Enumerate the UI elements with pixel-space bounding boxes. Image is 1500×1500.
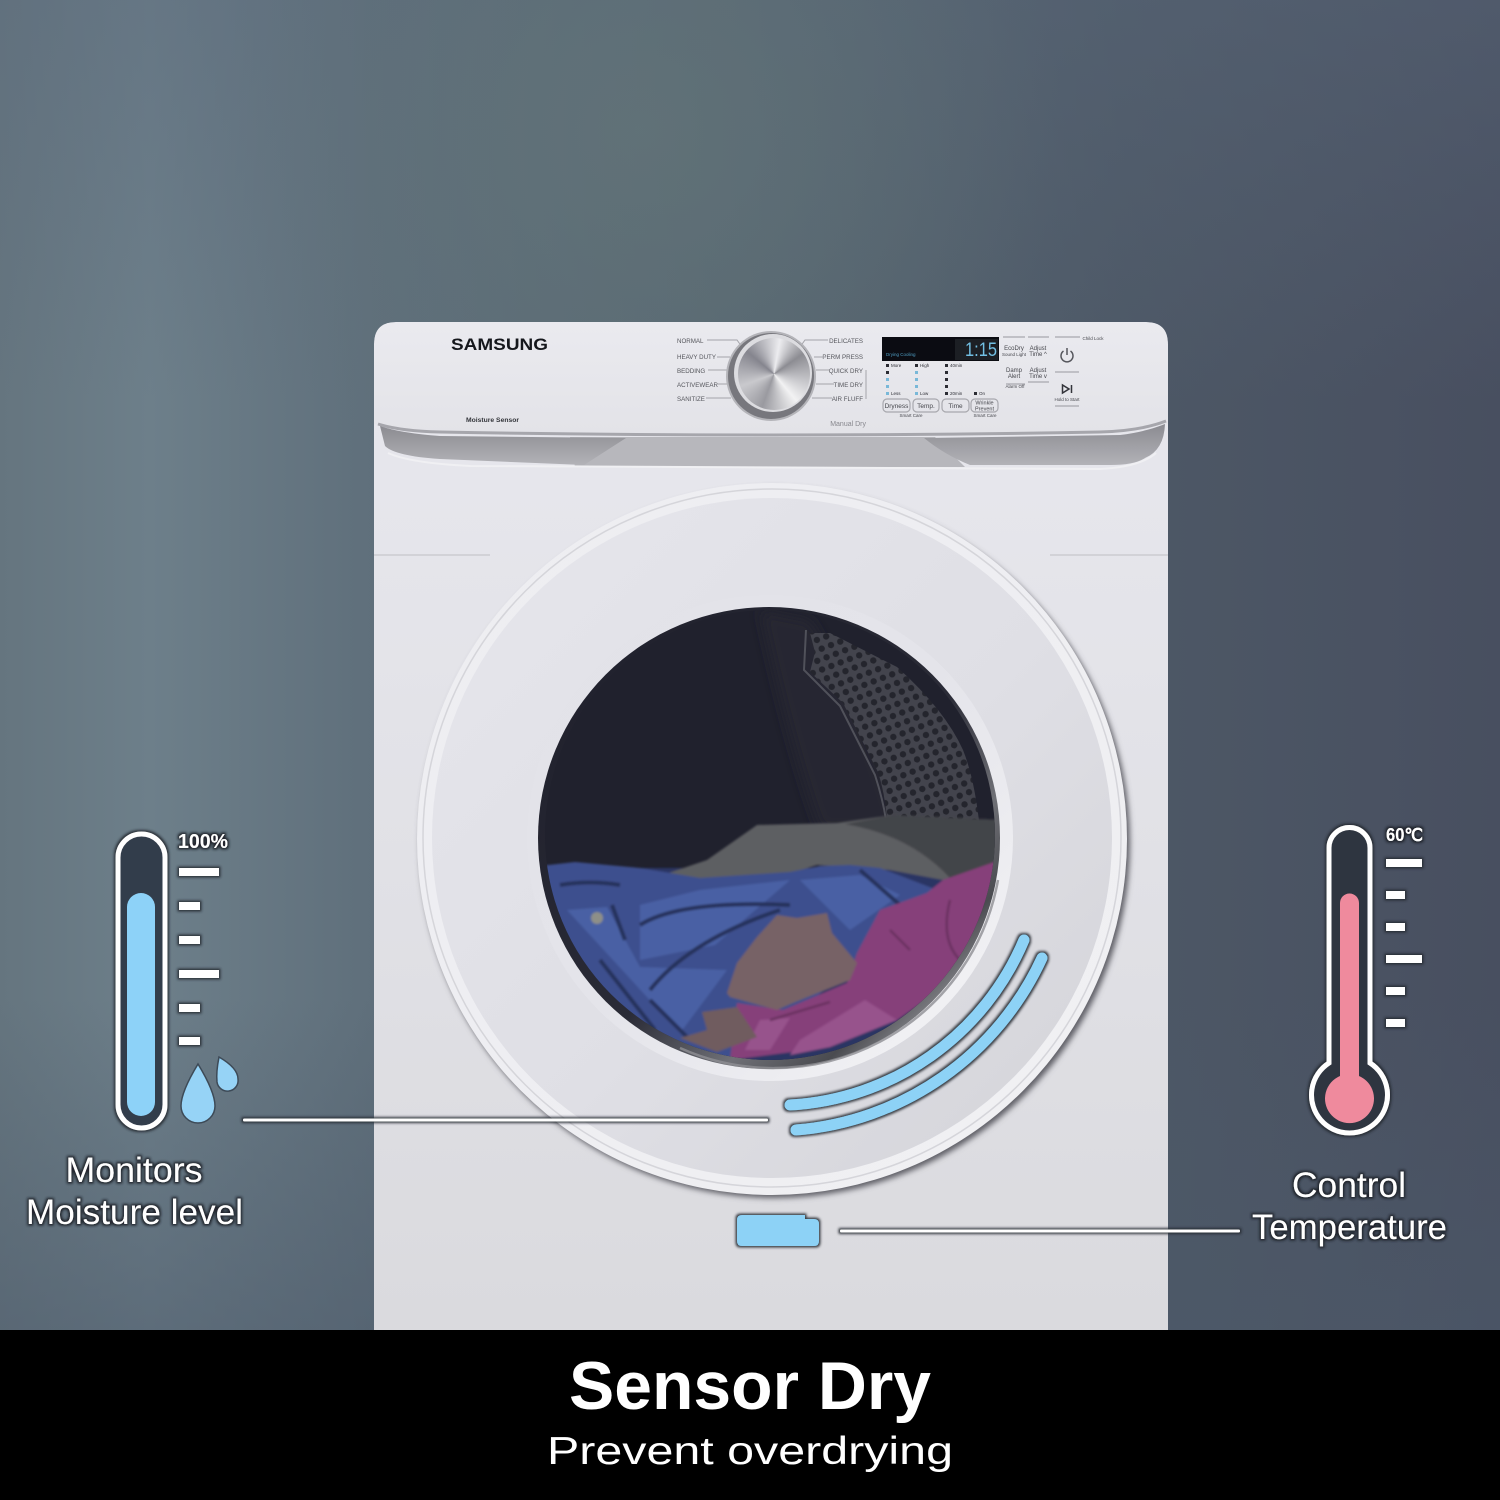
gauge tube: [118, 834, 165, 1128]
right side buttons: Sound Light: [1002, 352, 1027, 357]
footer bar: [0, 1330, 1500, 1500]
temperature sensor block: [737, 1215, 819, 1246]
right side buttons: Alert: [1008, 374, 1020, 380]
blue garment highlights: [567, 875, 900, 1033]
right cycle labels: AIR FLUFF: [832, 396, 863, 403]
option buttons: Dryness: [885, 403, 909, 410]
thermometer level: [1325, 894, 1374, 1123]
right side buttons: Adjust: [1030, 368, 1047, 374]
right side buttons: Time ^: [1029, 352, 1047, 358]
right side buttons: EcoDry: [1004, 346, 1024, 352]
icon: water drops: [181, 1057, 238, 1123]
digital display: Drying Cooling: [886, 352, 916, 357]
moisture gauge: [26, 831, 243, 1232]
subtitle: Prevent overdrying: [547, 1430, 953, 1473]
option buttons: Prevent: [975, 406, 994, 412]
leader line: moisture: [243, 1118, 768, 1122]
right side buttons: [1002, 336, 1104, 406]
clothes: [530, 815, 1000, 1070]
door face: [432, 498, 1112, 1178]
dryer appliance: [374, 322, 1168, 1330]
digital display: 1:15: [965, 340, 997, 361]
right side buttons: Alarm Off: [1006, 384, 1025, 389]
right cycle labels: Manual Dry: [830, 421, 866, 428]
option indicators: 20min: [950, 391, 963, 396]
left cycle labels: NORMAL: [677, 338, 704, 345]
blue garment creases: [560, 870, 900, 1040]
drum shading: [760, 610, 900, 830]
thermometer outline: [1312, 828, 1388, 1133]
window chrome rim: [538, 607, 1000, 1069]
control panel: [374, 322, 1168, 469]
power icon: [1061, 348, 1073, 362]
temperature gauge: [1252, 825, 1447, 1247]
option indicators: More: [891, 363, 902, 368]
option buttons: Smart Care: [973, 413, 997, 418]
start pause icon: [1062, 385, 1072, 393]
cycle dial: [726, 331, 816, 421]
door: [417, 483, 1130, 1198]
right cycle labels: [800, 338, 866, 428]
thermometer maximum: 60℃: [1386, 825, 1423, 845]
right cycle labels: TIME DRY: [834, 382, 863, 389]
door shadow: [420, 488, 1130, 1198]
moisture sensor arcs: [790, 940, 1042, 1130]
temperature label: Temperature: [1252, 1208, 1447, 1247]
leader line: temperature: [840, 1230, 1240, 1232]
option buttons: Smart Care: [899, 413, 923, 418]
right side buttons: Time v: [1029, 374, 1047, 380]
moisture sensor badge: Moisture Sensor: [466, 417, 519, 424]
thermometer ticks: [1386, 859, 1422, 1027]
moisture label: [26, 1151, 243, 1232]
handle recess: [380, 424, 1165, 469]
right cycle labels: QUICK DRY: [829, 368, 863, 375]
samsung logo: SAMSUNG: [451, 336, 548, 354]
moisture label: Moisture level: [26, 1193, 243, 1232]
option indicators: Low: [920, 391, 929, 396]
grey garment: [670, 816, 950, 881]
left cycle labels: SANITIZE: [677, 396, 705, 403]
right side buttons: Hold to Start: [1054, 397, 1080, 402]
option buttons: Temp.: [917, 403, 935, 410]
option indicators: [886, 363, 986, 396]
seam line: [374, 554, 1168, 556]
left cycle labels: [677, 338, 742, 403]
left cycle labels: ACTIVEWEAR: [677, 382, 718, 389]
gauge maximum: 100%: [178, 831, 228, 853]
magenta garment: [730, 860, 1000, 1060]
right cycle labels: PERM PRESS: [822, 354, 863, 361]
gauge level: [127, 893, 155, 1116]
left cycle labels: HEAVY DUTY: [677, 354, 716, 361]
option indicators: High: [920, 363, 930, 368]
drum mesh: [804, 630, 980, 830]
temperature label: [1252, 1166, 1447, 1247]
taupe garment: [727, 913, 857, 1010]
drum window: [547, 622, 995, 1060]
right side buttons: Adjust: [1030, 346, 1047, 352]
option buttons: Time: [948, 403, 963, 410]
left cycle labels: BEDDING: [677, 368, 705, 375]
right side buttons: Child Lock: [1082, 336, 1104, 341]
option indicators: 40min: [950, 363, 963, 368]
window trim: [644, 713, 1013, 1081]
option indicators: On: [979, 391, 986, 396]
option buttons: Wrinkle: [975, 400, 994, 406]
blue garment: [547, 860, 932, 1056]
dryer body: [374, 400, 1168, 1330]
right side buttons: Damp: [1006, 368, 1023, 374]
right cycle labels: DELICATES: [829, 338, 863, 345]
gauge ticks: [179, 868, 219, 1045]
temperature label: Control: [1292, 1166, 1406, 1205]
window rim highlight: [680, 880, 998, 1068]
digital display: [882, 337, 999, 361]
clothes base: [642, 867, 943, 1060]
title: Sensor Dry: [569, 1348, 931, 1424]
moisture label: Monitors: [66, 1151, 202, 1190]
door outer ring: [417, 483, 1127, 1195]
option indicators: Less: [891, 391, 901, 396]
option buttons: [883, 399, 998, 418]
